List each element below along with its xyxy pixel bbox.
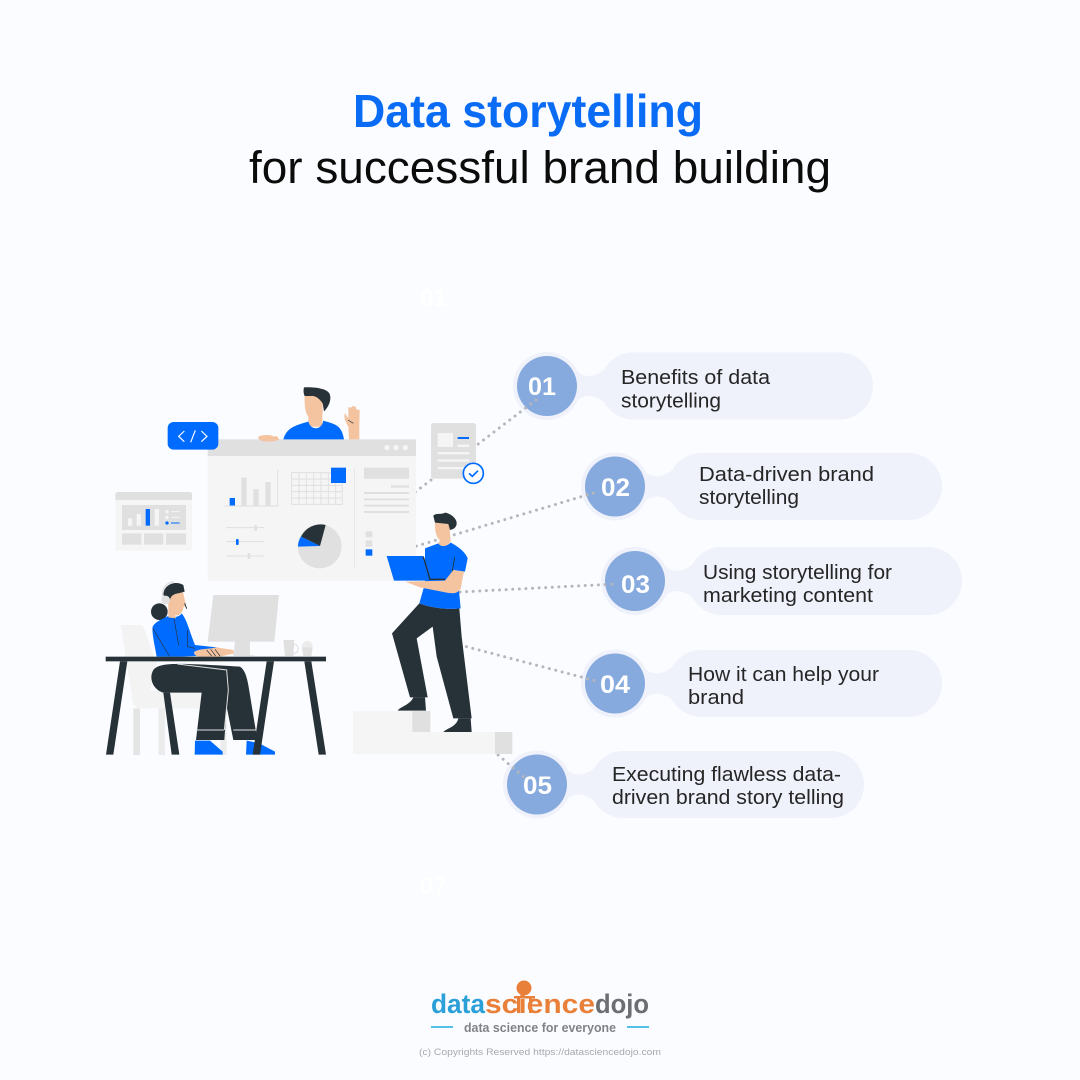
logo wordmark xyxy=(431,989,649,1019)
logo: data science dojo xyxy=(431,980,649,1035)
calendar grid xyxy=(292,468,346,504)
list item 01: 01 xyxy=(528,373,556,401)
bar chart xyxy=(224,470,278,506)
person waving above window xyxy=(258,387,360,441)
list item 03: 03 xyxy=(621,571,650,599)
woman figure xyxy=(151,582,275,755)
seated person at desk xyxy=(106,582,326,755)
logo wordmark: science xyxy=(485,989,595,1019)
illustration: team working with data dashboard xyxy=(106,387,512,755)
list item 05: driven brand story telling xyxy=(612,787,844,809)
list item 02: 02 xyxy=(601,474,630,502)
list item 01: storytelling xyxy=(621,390,721,412)
legend squares xyxy=(366,531,372,556)
list item 01: Benefits of data xyxy=(621,367,771,389)
document with check icon xyxy=(431,423,483,483)
list item 03 xyxy=(601,547,962,615)
steps xyxy=(353,711,512,754)
dashboard window xyxy=(208,439,416,581)
pie chart xyxy=(298,524,342,568)
list item 05: 05 xyxy=(523,772,552,800)
list item 04: brand xyxy=(688,687,744,709)
list item 03: marketing content xyxy=(703,585,873,607)
sidebar lines xyxy=(354,468,409,569)
list item 03: Using storytelling for xyxy=(703,562,892,584)
desk xyxy=(106,657,326,755)
list item 02 xyxy=(581,452,942,520)
mini dashboard card xyxy=(115,492,192,551)
person standing with laptop xyxy=(387,513,472,732)
logo wordmark: data xyxy=(431,989,486,1019)
list item 02: storytelling xyxy=(699,487,799,509)
list item 02: Data-driven brand xyxy=(699,464,874,486)
monitor xyxy=(208,595,279,656)
logo tagline: data science for everyone xyxy=(464,1020,616,1035)
title: for successful brand building xyxy=(249,142,831,193)
icon: code badge xyxy=(168,422,218,450)
title xyxy=(249,85,831,193)
title: Data storytelling xyxy=(353,85,703,137)
mug and plant xyxy=(283,640,313,656)
faint ghost number top: 01 xyxy=(420,285,447,312)
sliders xyxy=(226,525,264,559)
logo wordmark: dojo xyxy=(595,989,649,1019)
faint ghost number bottom: 07 xyxy=(420,873,447,900)
list item 04: How it can help your xyxy=(688,664,879,686)
list item 04 xyxy=(581,650,942,718)
list item 05: Executing flawless data- xyxy=(612,764,841,786)
dotted connectors xyxy=(410,397,615,778)
list item 01 xyxy=(513,352,873,420)
logo mark: torii figure xyxy=(514,980,535,1013)
copyright line: (c) Copyrights Reserved https://datasciencedojo.com xyxy=(419,1047,661,1058)
list item 04: 04 xyxy=(600,671,630,699)
list item 05 xyxy=(503,750,864,818)
chair xyxy=(121,625,227,755)
